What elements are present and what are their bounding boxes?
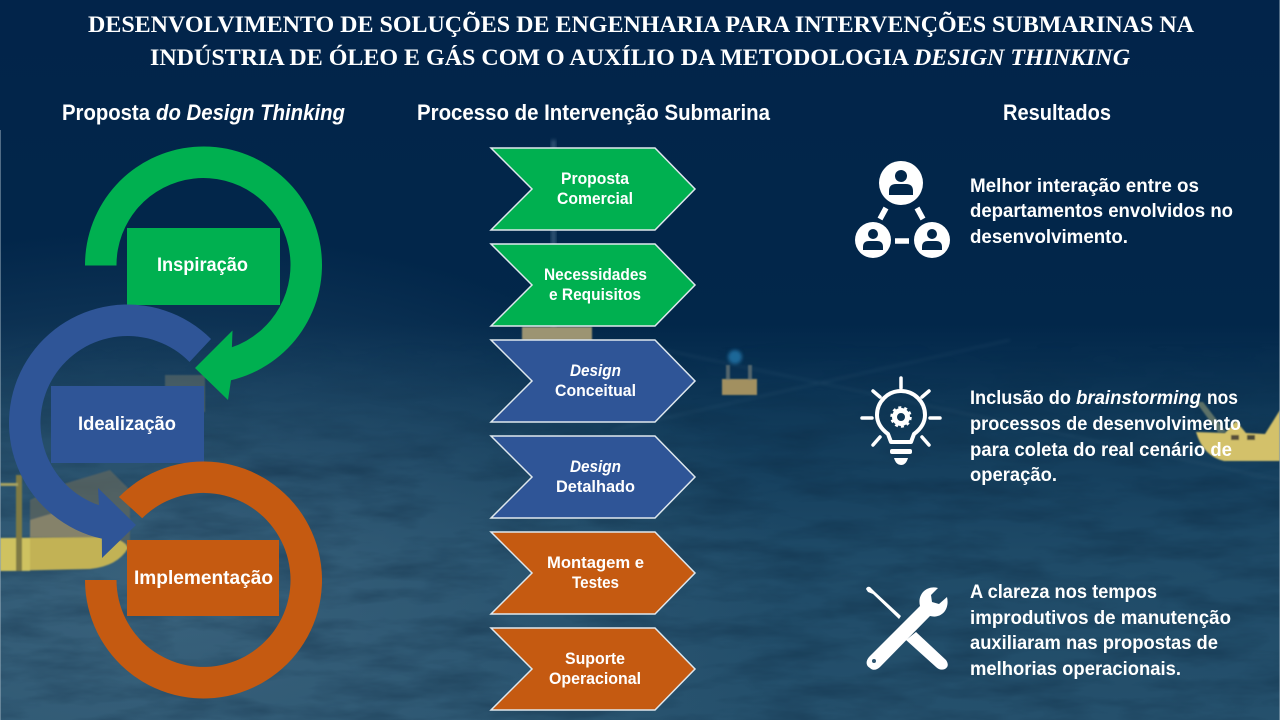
chevron: Proposta Comercial: Comercial (557, 190, 633, 208)
chevron: Necessidades e Requisitos: Necessidades (544, 266, 647, 284)
chevron: Proposta Comercial: Proposta (561, 170, 630, 188)
text: resultado 2: brainstorming (1076, 387, 1201, 409)
text: resultado 3: A clareza nos tempos (970, 581, 1157, 603)
text: resultado 1: desenvolvimento. (970, 226, 1128, 248)
panel: intervention process chevrons (491, 148, 695, 710)
box: Inspiração: Inspiração (157, 254, 248, 276)
text: resultado 3: melhorias operacionais. (970, 658, 1181, 680)
box: Inspiração (127, 228, 280, 305)
text: resultado 2: nos (1207, 387, 1238, 409)
chevron: Necessidades e Requisitos (491, 244, 695, 326)
ring: Implementação (85, 461, 322, 698)
chevron: Montagem e Testes: Testes (572, 574, 619, 592)
chevron: Design Conceitual: Conceitual (555, 382, 636, 400)
title: DESIGN THINKING (913, 45, 1130, 71)
right unit (1195, 402, 1280, 462)
icon: light bulb with gear (862, 378, 940, 465)
icon: wrench and screwdriver (866, 587, 948, 670)
text: resultado 2 (970, 387, 1241, 486)
text: resultado 1: Melhor interação entre os (970, 175, 1199, 197)
panel: Design Thinking cycle (9, 146, 322, 698)
text: resultado 1 (970, 175, 1233, 248)
text: resultado 3: auxiliaram nas propostas de (970, 632, 1218, 654)
chevron: Design Conceitual (491, 340, 695, 422)
arrow ring: Inspiração (85, 146, 322, 400)
box: Idealização (51, 386, 204, 463)
title: DESENVOLVIMENTO DE SOLUÇÕES DE ENGENHARIA PARA INTERVENÇÕES SUBMARINAS NA (88, 12, 1194, 38)
heading: Proposta do Design Thinking (62, 100, 346, 125)
text: resultado 3: improdutivos de manutenção (970, 607, 1231, 629)
box: Implementação (127, 540, 279, 616)
text: resultado 2: processos de desenvolvimento (970, 413, 1241, 435)
chevron: Proposta Comercial (491, 148, 695, 230)
chevron: Suporte Operacional: Operacional (549, 670, 641, 688)
icon: connected people (855, 161, 950, 258)
heading: Processo de Intervenção Submarina: Processo de Intervenção Submarina (417, 100, 771, 125)
chevron: Design Detalhado: Detalhado (556, 478, 635, 496)
chevron: Montagem e Testes (491, 532, 695, 614)
heading: Resultados: Resultados (1003, 100, 1111, 125)
text: resultado 1: departamentos envolvidos no (970, 200, 1233, 222)
text: resultado 2: Inclusão do (970, 387, 1071, 409)
chevron: Design Detalhado (491, 436, 695, 518)
title: INDÚSTRIA DE ÓLEO E GÁS COM O AUXÍLIO DA METODOLOGIA (150, 44, 909, 71)
box: Idealização: Idealização (78, 413, 176, 435)
text: resultado 3 (970, 581, 1231, 680)
chevron: Necessidades e Requisitos: e Requisitos (549, 286, 641, 304)
central units (165, 375, 205, 412)
heading: Proposta do Design Thinking: do Design Thinking (156, 100, 346, 125)
left unit (30, 470, 130, 545)
text: resultado 2: operação. (970, 464, 1057, 486)
chevron: Suporte Operacional: Suporte (565, 650, 625, 668)
text: resultado 2: para coleta do real cenário de (970, 439, 1232, 461)
arrow ring: Idealização (9, 304, 211, 558)
heading: Proposta do Design Thinking: Proposta (62, 100, 151, 125)
box: Implementação: Implementação (134, 567, 273, 589)
chevron: Montagem e Testes: Montagem e (547, 554, 644, 572)
chevron: Design Conceitual: Design (570, 362, 621, 380)
title (88, 12, 1194, 71)
chevron: Design Detalhado: Design (570, 458, 621, 476)
chevron: Suporte Operacional (491, 628, 695, 710)
